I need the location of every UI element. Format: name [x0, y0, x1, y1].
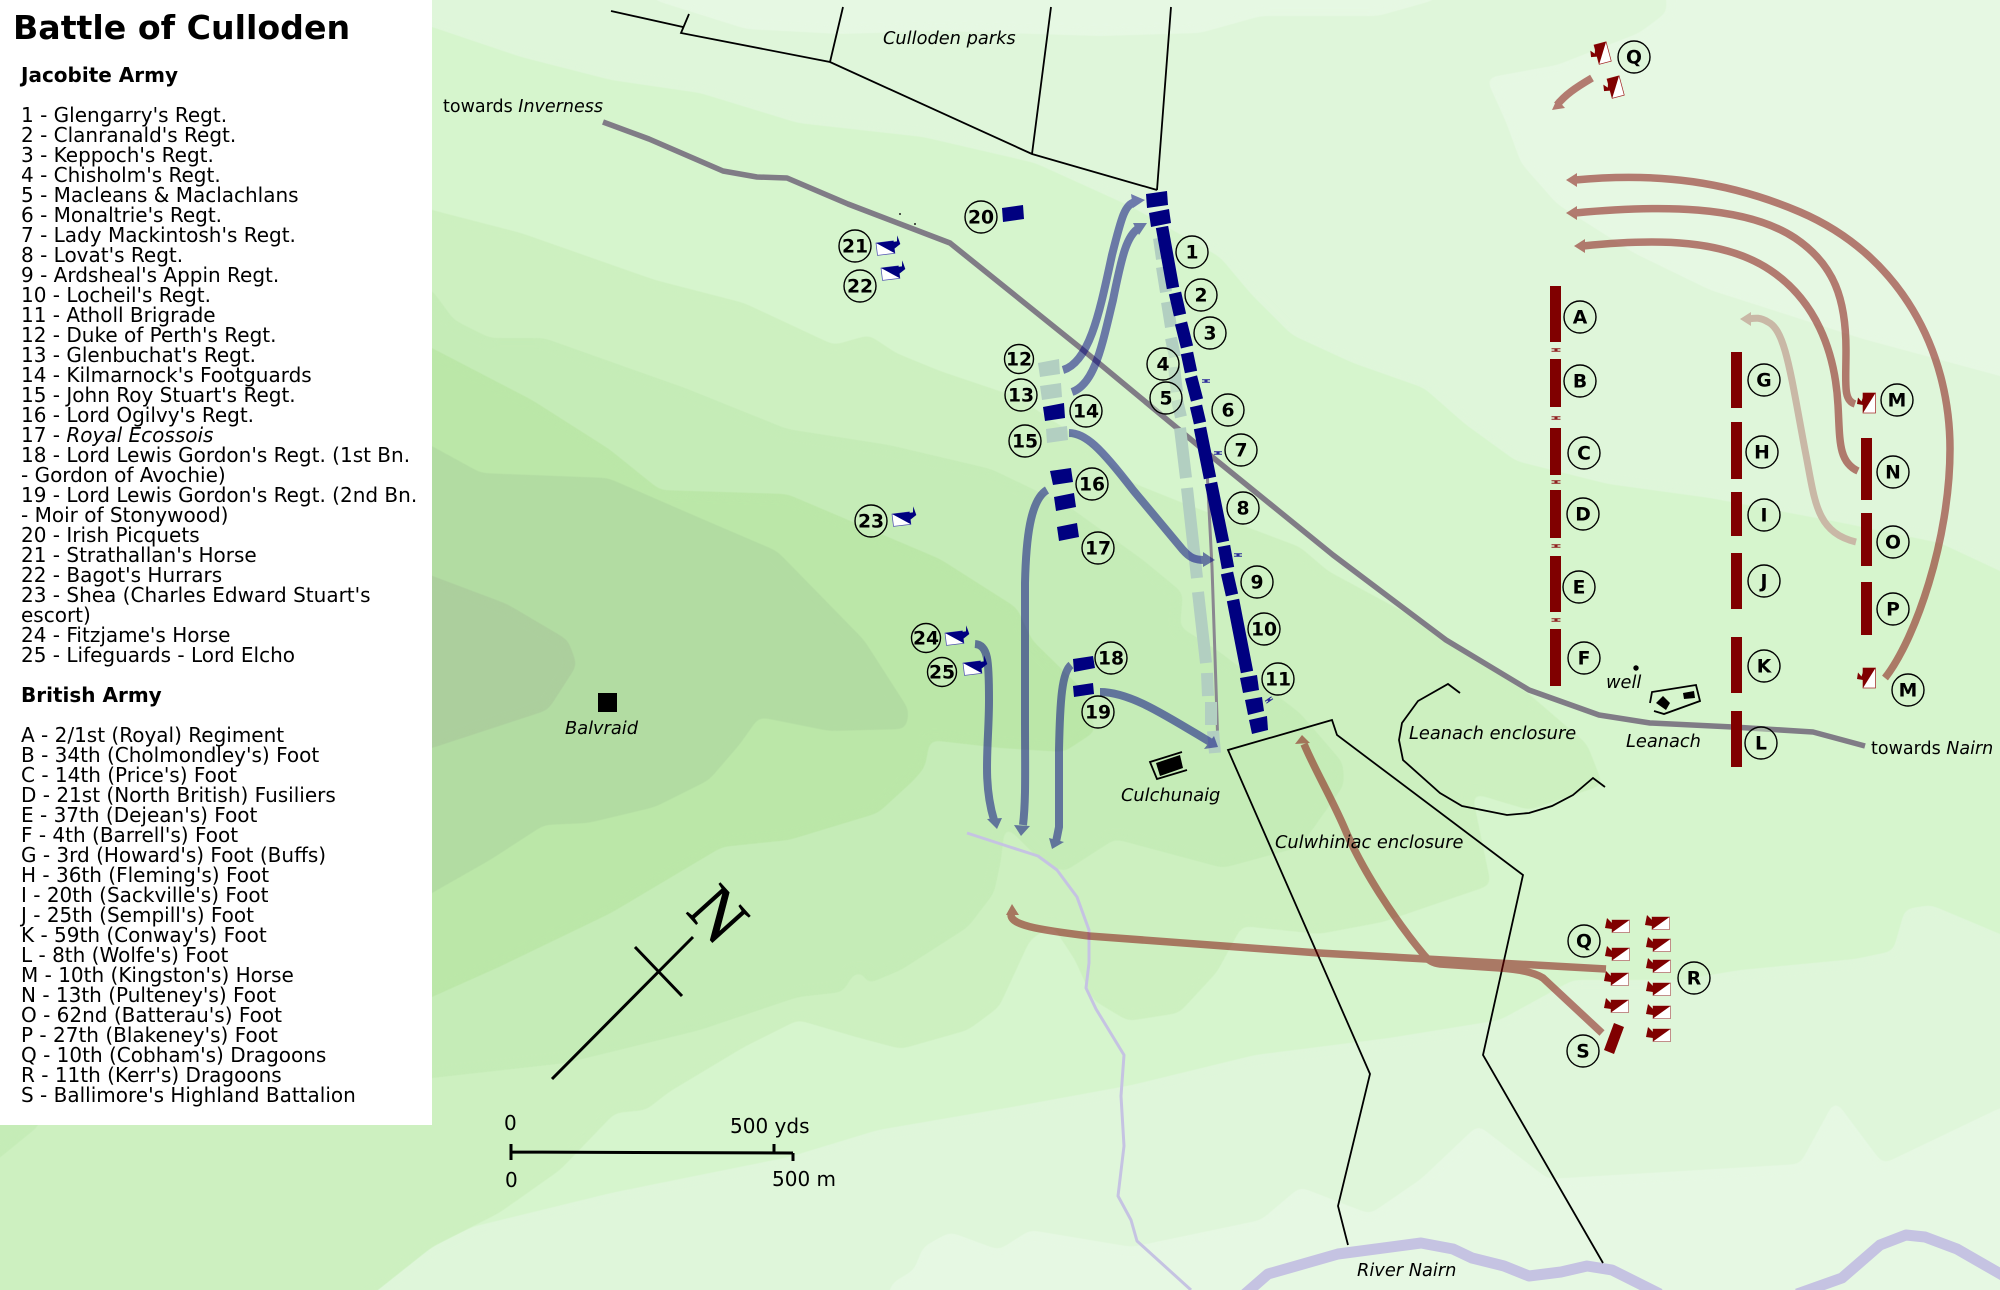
list: Jacobite regiments: - Gordon of Avochie): [21, 463, 226, 487]
numbered jacobite labels: 3: [1203, 324, 1217, 344]
road: branch past Culchunaig: [1207, 470, 1218, 747]
list: British regiments: A - 2/1st (Royal) Regiment: [21, 723, 284, 747]
lettered british labels: R: [1687, 968, 1702, 990]
lettered british labels: F: [1578, 648, 1590, 670]
list: Jacobite regiments: 2 - Clanranald's Regt.: [21, 123, 236, 147]
numbered jacobite labels: 11: [1265, 670, 1291, 690]
list: Jacobite regiments: 14 - Kilmarnock's Footguards: [21, 363, 312, 387]
list: British regiments: E - 37th (Dejean's) Foot: [21, 803, 258, 827]
numbered jacobite labels: 6: [1221, 400, 1235, 422]
list: British regiments: L - 8th (Wolfe's) Foot: [21, 943, 229, 967]
river: River Nairn: [1245, 1235, 2000, 1290]
place names: well: [1606, 672, 1641, 693]
list: British regiments: J - 25th (Sempill's) Foot: [19, 903, 254, 927]
lettered british labels: O: [1885, 532, 1901, 554]
british arrow: O regiment (pale): [1740, 312, 1856, 542]
lettered british labels: B: [1573, 372, 1587, 392]
numbered jacobite labels: 24: [913, 628, 939, 650]
british infantry units: [1550, 286, 1872, 1054]
list: British regiments: B - 34th (Cholmondley's) Foot: [21, 743, 319, 767]
british cavalry and dragoons: [1588, 42, 1876, 1041]
tiny marks beside road: [899, 213, 916, 225]
list: Jacobite regiments: 5 - Macleans & Maclachlans: [21, 183, 299, 207]
jacobite movement arrows: [975, 194, 1218, 849]
jacobite cavalry 21-25: [875, 235, 988, 675]
list: British regiments: K - 59th (Conway's) Foot: [21, 923, 267, 947]
british guns: [1552, 348, 1560, 622]
place names: towards Inverness: [443, 97, 603, 117]
numbered jacobite labels: 15: [1012, 432, 1038, 452]
lettered british labels: A: [1573, 308, 1588, 328]
place names: Culloden parks: [883, 28, 1016, 49]
list: Jacobite regiments: 1 - Glengarry's Regt.: [21, 103, 227, 127]
numbered jacobite labels: 19: [1085, 702, 1111, 724]
list: British regiments: O - 62nd (Batterau's) Foot: [21, 1003, 282, 1027]
lettered british labels: J: [1759, 572, 1767, 592]
list: Jacobite regiments: 4 - Chisholm's Regt.: [21, 163, 221, 187]
heading: British Army: British Army: [21, 683, 162, 707]
lettered british labels: H: [1754, 442, 1770, 464]
lettered british labels: P: [1886, 600, 1900, 620]
lettered british labels: N: [1885, 462, 1901, 484]
list: Jacobite regiments: 16 - Lord Ogilvy's Regt.: [21, 403, 254, 427]
place names: Culwhiniac enclosure: [1275, 832, 1464, 853]
lettered british labels: D: [1575, 504, 1591, 526]
lettered british labels: L: [1755, 734, 1767, 754]
list: Jacobite regiments: 21 - Strathallan's Horse: [21, 543, 257, 567]
list: Jacobite regiments: [21, 103, 417, 667]
place names: Culchunaig: [1121, 785, 1220, 806]
list: Jacobite regiments: 17 - Royal Ecossois: [21, 423, 213, 447]
lettered british labels: I: [1761, 506, 1767, 526]
jacobite guns: [1202, 379, 1273, 704]
building: Culchunaig: [1150, 752, 1187, 779]
place names: towards Nairn: [1871, 739, 1993, 759]
list: Jacobite regiments: 24 - Fitzjame's Horse: [21, 623, 230, 647]
scale bar: 500 m: [772, 1167, 836, 1191]
list: Jacobite regiments: 25 - Lifeguards - Lord Elcho: [21, 643, 295, 667]
road: Inverness to Nairn: [603, 122, 1865, 746]
list: Jacobite regiments: 3 - Keppoch's Regt.: [21, 143, 214, 167]
place names: Balvraid: [565, 718, 639, 739]
lettered british labels: M: [1888, 390, 1906, 412]
title: Battle of Culloden: [13, 8, 350, 47]
numbered jacobite labels: 12: [1006, 350, 1032, 370]
list: British regiments: S - Ballimore's Highland Battalion: [21, 1083, 356, 1107]
list: British regiments: [19, 723, 356, 1107]
numbered jacobite labels: 25: [929, 662, 955, 684]
scale bar: [504, 1111, 836, 1192]
walls: Leanach enclosure: [1399, 684, 1605, 815]
list: Jacobite regiments: 9 - Ardsheal's Appin Regt.: [21, 263, 279, 287]
numbered jacobite labels: 4: [1156, 354, 1170, 376]
lettered british labels: Q: [1576, 932, 1592, 952]
numbered jacobite labels: 20: [968, 208, 994, 228]
numbered jacobite labels: 17: [1085, 538, 1111, 560]
list: British regiments: M - 10th (Kingston's) Horse: [21, 963, 294, 987]
numbered jacobite labels: 16: [1079, 474, 1105, 496]
jacobite reserve: pale former positions 12, 13, 15: [1038, 359, 1068, 443]
numbered jacobite labels: 13: [1008, 386, 1034, 406]
list: British regiments: N - 13th (Pulteney's) Foot: [21, 983, 276, 1007]
list: British regiments: D - 21st (North British) Fusiliers: [21, 783, 336, 807]
building: Balvraid: [598, 693, 617, 712]
lettered british labels: [1563, 41, 1924, 1067]
well marker: [1633, 665, 1639, 671]
river: small burn: [967, 833, 1191, 1290]
lettered british labels: G: [1756, 370, 1772, 392]
walls: Culwhiniac enclosure: [1228, 720, 1603, 1263]
numbered jacobite labels: 23: [858, 512, 884, 532]
building: Leanach: [1650, 685, 1700, 714]
scale bar: 0: [505, 1168, 518, 1192]
numbered jacobite labels: 10: [1251, 620, 1277, 640]
lettered british labels: M: [1899, 680, 1917, 702]
list: British regiments: H - 36th (Fleming's) Foot: [21, 863, 269, 887]
scale bar: 500 yds: [730, 1114, 809, 1138]
list: Jacobite regiments: - Moir of Stonywood): [21, 503, 228, 527]
list: British regiments: G - 3rd (Howard's) Foot (Buffs): [21, 843, 326, 867]
list: British regiments: F - 4th (Barrell's) Foot: [21, 823, 238, 847]
jacobite front line units: [1146, 191, 1268, 734]
jacobite original positions (pale): [1159, 238, 1215, 753]
list: British regiments: Q - 10th (Cobham's) Dragoons: [21, 1043, 326, 1067]
list: Jacobite regiments: 11 - Atholl Brigrade: [21, 303, 216, 327]
list: Jacobite regiments: 15 - John Roy Stuart's Regt.: [21, 383, 296, 407]
list: Jacobite regiments: escort): [21, 603, 91, 627]
panel: legend: [0, 0, 432, 1125]
list: Jacobite regiments: 23 - Shea (Charles Edward Stuart's: [21, 583, 371, 607]
list: British regiments: I - 20th (Sackville's) Foot: [21, 883, 269, 907]
lettered british labels: Q: [1626, 48, 1642, 68]
numbered jacobite labels: 18: [1098, 648, 1124, 670]
place names: [443, 28, 1993, 1281]
numbered jacobite labels: 1: [1185, 242, 1199, 264]
list: Jacobite regiments: 18 - Lord Lewis Gordon's Regt. (1st Bn.: [21, 443, 410, 467]
list: British regiments: P - 27th (Blakeney's) Foot: [21, 1023, 278, 1047]
numbered jacobite labels: 5: [1159, 388, 1173, 410]
list: Jacobite regiments: 13 - Glenbuchat's Regt.: [21, 343, 256, 367]
jacobite reserve units 14, 16, 17, 18, 19, 20: [1002, 205, 1095, 697]
list: British regiments: C - 14th (Price's) Foot: [21, 763, 237, 787]
place names: Leanach enclosure: [1409, 723, 1576, 744]
list: Jacobite regiments: 22 - Bagot's Hurrars: [21, 563, 222, 587]
north arrow: [552, 870, 764, 1079]
lettered british labels: S: [1576, 1042, 1590, 1062]
numbered jacobite labels: 8: [1236, 498, 1250, 520]
british movement arrows: [1006, 78, 1950, 1033]
list: Jacobite regiments: 20 - Irish Picquets: [21, 523, 200, 547]
lettered british labels: K: [1757, 656, 1773, 678]
numbered jacobite labels: 21: [842, 236, 868, 258]
place names: River Nairn: [1357, 1260, 1456, 1281]
numbered jacobite labels: 22: [847, 276, 873, 298]
numbered jacobite labels: 14: [1073, 402, 1099, 422]
list: Jacobite regiments: 7 - Lady Mackintosh's Regt.: [21, 223, 296, 247]
list: Jacobite regiments: 19 - Lord Lewis Gordon's Regt. (2nd Bn.: [21, 483, 417, 507]
list: Jacobite regiments: 8 - Lovat's Regt.: [21, 243, 183, 267]
list: British regiments: R - 11th (Kerr's) Dragoons: [21, 1063, 282, 1087]
numbered jacobite labels: 9: [1250, 572, 1264, 594]
numbered jacobite labels: [839, 201, 1294, 728]
lettered british labels: E: [1573, 578, 1585, 598]
numbered jacobite labels: 2: [1194, 286, 1208, 306]
list: Jacobite regiments: 10 - Locheil's Regt.: [21, 283, 211, 307]
heading: Jacobite Army: Jacobite Army: [19, 63, 178, 87]
numbered jacobite labels: 7: [1234, 440, 1248, 462]
walls: Culloden parks: [611, 7, 1171, 190]
north arrow: N: [674, 870, 764, 958]
scale bar: 0: [504, 1111, 517, 1135]
lettered british labels: C: [1577, 444, 1591, 464]
list: Jacobite regiments: 6 - Monaltrie's Regt.: [21, 203, 222, 227]
list: Jacobite regiments: 12 - Duke of Perth's Regt.: [21, 323, 276, 347]
place names: Leanach: [1626, 731, 1701, 752]
